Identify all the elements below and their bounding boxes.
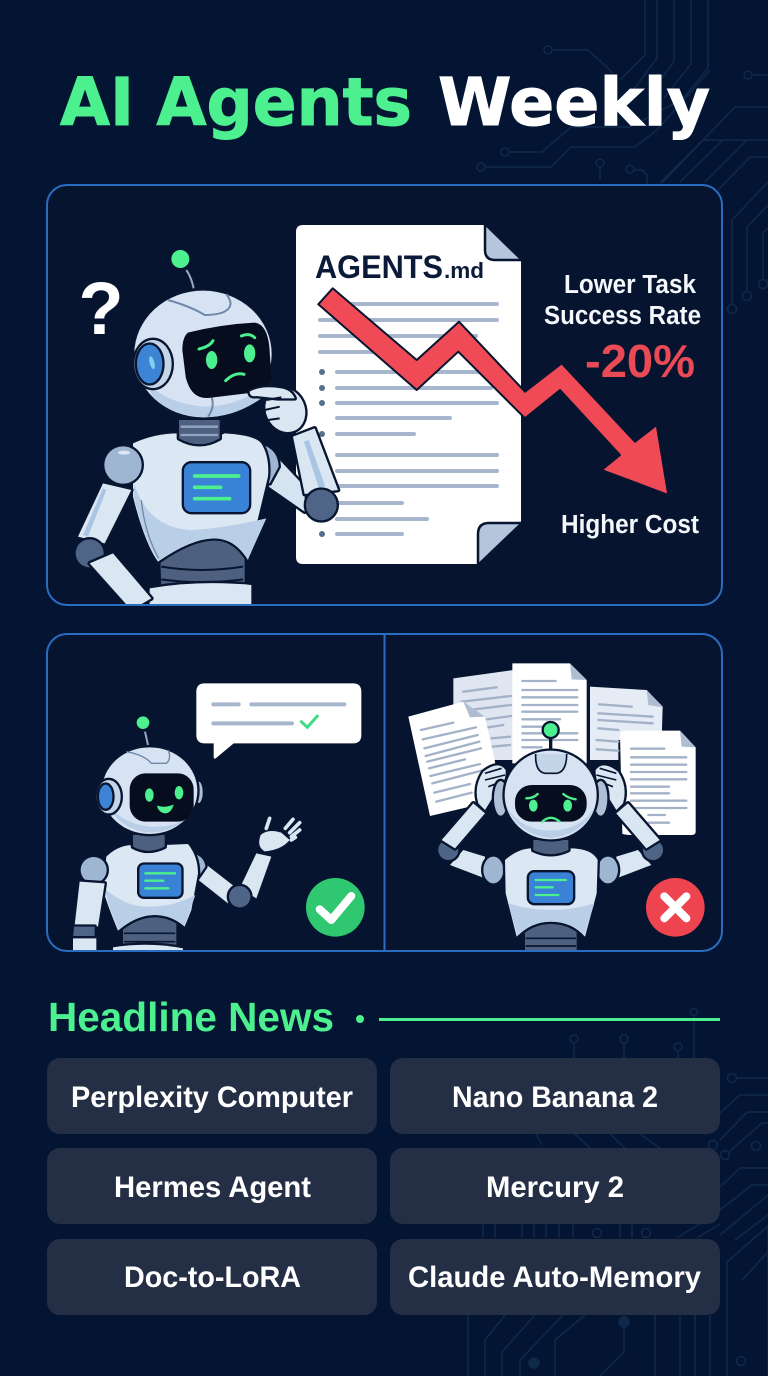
heading: Headline News — [48, 994, 720, 1040]
heading: Headline News: Headline News — [48, 994, 334, 1040]
background circuit traces — [468, 0, 768, 1376]
icon: red cross badge — [646, 878, 705, 937]
news item: Mercury 2 — [390, 1148, 720, 1224]
robot: happy — [73, 716, 300, 957]
callout: speech bubble — [196, 683, 361, 759]
news item: Hermes Agent: Hermes Agent — [114, 1171, 311, 1204]
news item: Doc-to-LoRA: Doc-to-LoRA — [124, 1261, 301, 1294]
robot: confused thinker — [76, 250, 338, 610]
arrow: falling trend — [318, 288, 668, 495]
title — [60, 64, 710, 141]
document: AGENTS.md: AGENTS — [315, 249, 443, 285]
stat: -20%: -20% — [585, 335, 695, 387]
news item: Claude Auto-Memory: Claude Auto-Memory — [408, 1261, 701, 1294]
panel: AGENTS.md impact — [47, 185, 722, 610]
icon: green check badge — [306, 878, 365, 937]
label: lower task success rate: Success Rate — [544, 302, 701, 330]
news item: Mercury 2: Mercury 2 — [486, 1171, 624, 1204]
document: AGENTS.md — [295, 224, 522, 565]
robot: stressed — [438, 722, 663, 953]
label: lower task success rate: Lower Task — [564, 271, 697, 299]
label: higher cost: Higher Cost — [561, 511, 699, 539]
news item: Hermes Agent — [47, 1148, 377, 1224]
title: Weekly — [438, 64, 710, 141]
icon: question mark: ? — [78, 267, 124, 350]
title: AI Agents — [60, 64, 412, 141]
news item: Doc-to-LoRA — [47, 1239, 377, 1315]
news item: Perplexity Computer — [47, 1058, 377, 1134]
panel: good vs overloaded comparison — [47, 634, 722, 957]
documents: pile behind robot — [408, 663, 696, 835]
news item: Perplexity Computer: Perplexity Computer — [71, 1081, 353, 1114]
document: AGENTS.md: .md — [444, 258, 484, 283]
sub-panel: focused robot with concise reply — [73, 683, 365, 957]
news item: Nano Banana 2: Nano Banana 2 — [452, 1081, 658, 1114]
label: lower task success rate — [544, 271, 701, 330]
news grid — [47, 1058, 720, 1315]
sub-panel: overwhelmed robot with too many documents — [408, 663, 705, 953]
news item: Nano Banana 2 — [390, 1058, 720, 1134]
news item: Claude Auto-Memory — [390, 1239, 720, 1315]
